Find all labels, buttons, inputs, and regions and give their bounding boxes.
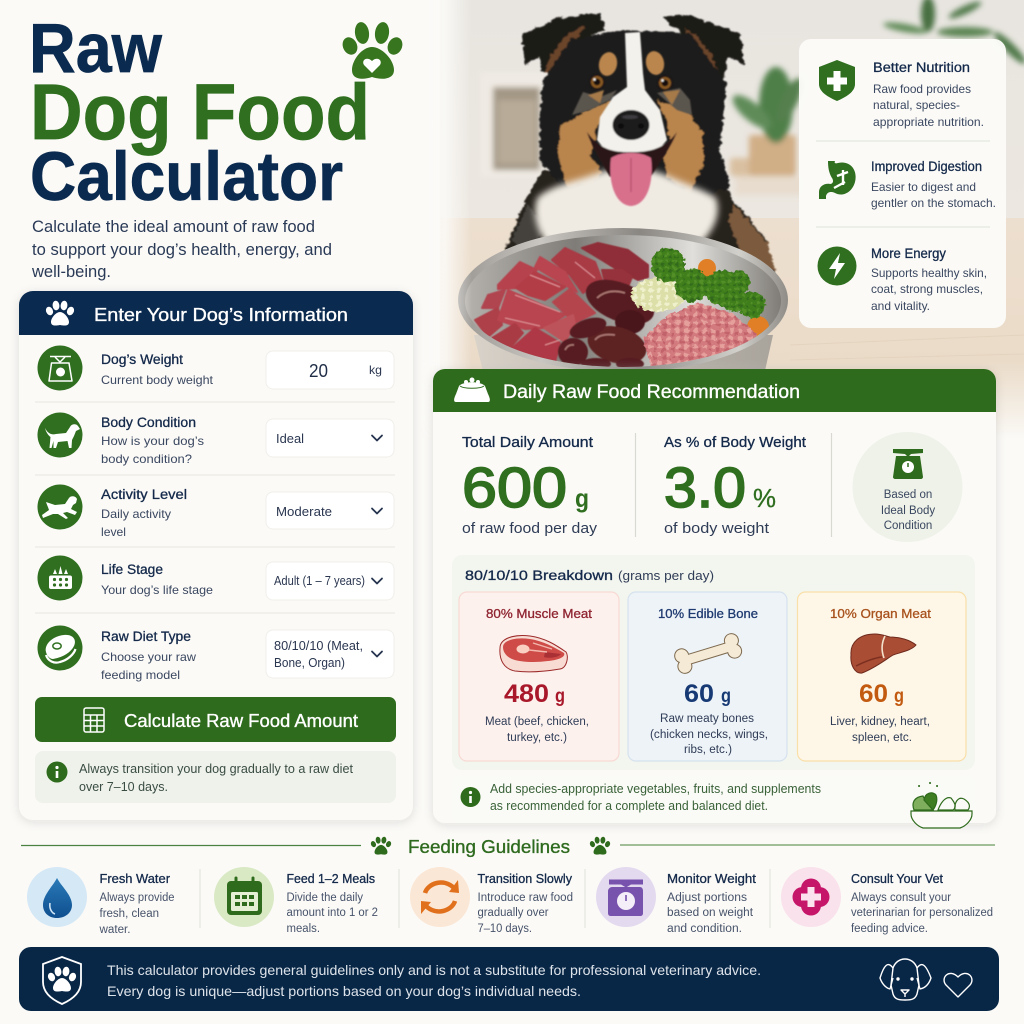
card: muscle meat: turkey, etc.) — [507, 732, 567, 744]
muscle meat chunks — [475, 243, 648, 362]
ground meat — [643, 303, 760, 372]
row: life stage — [38, 556, 394, 600]
row: raw diet type: Choose your raw — [101, 650, 196, 664]
icon: bone — [674, 633, 743, 674]
card: edible bone: 10% Edible Bone — [658, 606, 758, 621]
panel: enter your dog's information — [19, 291, 413, 820]
icon: heart outline — [944, 973, 972, 997]
guideline: feed 1-2 meals — [214, 867, 378, 935]
recommendation header — [433, 369, 996, 412]
row: activity level: Activity Level — [101, 487, 187, 502]
row: dog's weight: Dog’s Weight — [101, 352, 183, 367]
card: muscle meat: g — [555, 686, 565, 707]
row: activity level: level — [101, 525, 126, 539]
row: dog's weight: 20 — [309, 361, 328, 381]
card: edible bone: 60 — [684, 680, 714, 708]
note: transition tip — [35, 751, 396, 803]
guideline: transition slowly: Introduce raw food — [478, 892, 573, 904]
stat: total daily amount — [462, 435, 598, 537]
stat: total daily amount: 600 — [462, 456, 567, 520]
recommendation header: Daily Raw Food Recommendation — [503, 382, 800, 403]
subtitle: Calculate the ideal amount of raw food — [32, 217, 315, 236]
card: organ meat: spleen, etc. — [852, 732, 912, 744]
card: muscle meat: 80% Muscle Meat — [486, 606, 592, 621]
guideline: feed 1-2 meals: amount into 1 or 2 — [286, 907, 378, 919]
panel: daily raw food recommendation — [433, 369, 996, 828]
note: supplements: as recommended for a complete and balanced diet. — [490, 799, 768, 813]
stat: percent of body weight — [664, 435, 806, 537]
row: raw diet type: Bone, Organ) — [274, 656, 345, 670]
card: muscle meat: 480 — [504, 680, 549, 708]
guideline: monitor weight: Monitor Weight — [667, 872, 757, 886]
row: dog's weight — [38, 346, 394, 390]
button: calculate raw food amount — [35, 697, 396, 742]
badge: based on ideal body condition — [852, 432, 962, 542]
guideline: transition slowly: 7–10 days. — [478, 923, 532, 935]
guideline: fresh water: fresh, clean — [100, 908, 159, 920]
note: transition tip: over 7–10 days. — [79, 780, 168, 794]
icon: dog outline — [880, 959, 931, 1000]
row: dog's weight: Current body weight — [101, 373, 214, 387]
badge: based on ideal body condition: Ideal Body — [881, 505, 935, 517]
card: edible bone: (chicken necks, wings, — [650, 729, 768, 741]
row: body condition: How is your dog’s — [101, 434, 204, 448]
guideline: monitor weight — [596, 867, 757, 935]
guideline: fresh water: water. — [98, 924, 130, 936]
title: Dog Food — [30, 67, 370, 156]
subtitle — [31, 217, 332, 281]
icon: liver — [851, 634, 916, 673]
guideline: monitor weight: Adjust portions — [667, 892, 747, 904]
stat: total daily amount: g — [575, 483, 589, 513]
row: raw diet type: feeding model — [101, 668, 180, 682]
panel: benefits — [799, 39, 1006, 328]
card: edible bone — [628, 592, 787, 761]
guideline: consult your vet — [781, 867, 993, 935]
note: supplements — [452, 776, 975, 822]
row: activity level — [38, 484, 394, 539]
guideline: feed 1-2 meals: meals. — [286, 923, 320, 935]
card: organ meat: g — [894, 686, 904, 707]
card: edible bone: ribs, etc.) — [684, 744, 732, 756]
disclaimer bar: This calculator provides general guidelines only and is not a substitute for professional veterinary advice. — [107, 962, 761, 978]
benefit: more energy: and vitality. — [871, 299, 930, 313]
benefit: more energy: coat, strong muscles, — [871, 282, 983, 296]
disclaimer bar — [19, 947, 999, 1011]
wooden floor lines — [790, 335, 1024, 360]
row: raw diet type — [38, 626, 394, 682]
badge: based on ideal body condition: Based on — [884, 489, 932, 501]
card: muscle meat: Meat (beef, chicken, — [485, 716, 589, 728]
row: body condition — [38, 412, 394, 466]
note: supplements: Add species-appropriate vegetables, fruits, and supplements — [490, 782, 821, 796]
title — [29, 9, 370, 215]
card: organ meat: 60 — [859, 680, 888, 708]
subtitle: to support your dog’s health, energy, and — [32, 240, 332, 259]
stat: percent of body weight: % — [753, 483, 776, 513]
heading: feeding guidelines — [21, 836, 995, 857]
guideline: monitor weight: based on weight — [667, 907, 754, 919]
row: raw diet type: 80/10/10 (Meat, — [274, 639, 363, 653]
benefit: improved digestion — [819, 159, 996, 210]
stat: percent of body weight: 3.0 — [664, 456, 746, 520]
card: organ meat: 10% Organ Meat — [830, 606, 931, 621]
guideline: consult your vet: Consult Your Vet — [851, 872, 944, 886]
icon: green paw with heart — [340, 21, 405, 79]
benefit: more energy: Supports healthy skin, — [871, 266, 987, 280]
stat: percent of body weight: of body weight — [664, 520, 770, 537]
note: transition tip: Always transition your dog gradually to a raw diet — [79, 762, 354, 776]
white chest fur — [535, 168, 718, 242]
benefit: improved digestion: Improved Digestion — [871, 159, 982, 174]
row: life stage: Adult (1 – 7 years) — [274, 574, 365, 588]
benefit: better nutrition — [819, 60, 984, 129]
benefit: better nutrition: natural, species- — [873, 98, 960, 112]
title: Calculator — [30, 138, 343, 215]
stat: total daily amount: of raw food per day — [462, 520, 598, 537]
card: edible bone: g — [721, 686, 731, 707]
guideline: monitor weight: and condition. — [667, 923, 742, 935]
vegetables — [698, 259, 716, 277]
card: organ meat — [798, 592, 966, 761]
guideline: fresh water: Fresh Water — [100, 872, 170, 886]
guideline: feed 1-2 meals: Divide the daily — [286, 892, 363, 904]
subtitle: well-being. — [31, 262, 111, 281]
icon: salad bowl — [911, 783, 972, 828]
badge: based on ideal body condition: Condition — [884, 520, 932, 532]
row: activity level: Daily activity — [101, 507, 171, 521]
benefit: better nutrition: Better Nutrition — [873, 60, 970, 75]
benefit: better nutrition: appropriate nutrition. — [873, 115, 984, 129]
icon: steak — [500, 636, 567, 672]
hero photo: dog with raw food bowl — [420, 0, 1024, 440]
row: body condition: body condition? — [101, 452, 192, 466]
guideline: consult your vet: Always consult your — [851, 892, 951, 904]
guideline: fresh water — [27, 867, 174, 936]
breakdown box: (grams per day) — [618, 568, 714, 583]
card: muscle meat — [459, 592, 619, 761]
guideline: transition slowly: gradually over — [478, 907, 549, 919]
stat: total daily amount: Total Daily Amount — [462, 435, 593, 451]
guideline: fresh water: Always provide — [100, 892, 174, 904]
guideline: consult your vet: feeding advice. — [851, 923, 928, 935]
card: edible bone: Raw meaty bones — [660, 713, 754, 725]
left photo fade — [440, 0, 470, 370]
panel header — [19, 291, 413, 335]
row: dog's weight: kg — [369, 363, 382, 377]
title: Raw — [29, 9, 163, 87]
row: life stage: Life Stage — [101, 562, 163, 577]
dog — [500, 13, 775, 280]
guideline: transition slowly — [410, 867, 573, 935]
guideline: consult your vet: veterinarian for personalized — [851, 907, 993, 919]
panel header: Enter Your Dog’s Information — [94, 304, 348, 325]
benefit: more energy: More Energy — [871, 246, 946, 261]
disclaimer bar: Every dog is unique—adjust portions based on your dog’s individual needs. — [107, 983, 581, 999]
row: activity level: Moderate — [276, 504, 332, 519]
icon: paw shield — [43, 957, 81, 1004]
benefit: better nutrition: Raw food provides — [873, 82, 971, 96]
breakdown box — [452, 555, 975, 770]
stat: percent of body weight: As % of Body Weight — [664, 435, 806, 451]
row: life stage: Your dog’s life stage — [101, 583, 213, 597]
benefit: more energy — [818, 246, 987, 313]
breakdown box: 80/10/10 Breakdown — [465, 567, 613, 583]
liver pieces — [558, 279, 655, 367]
button: calculate raw food amount: Calculate Raw Food Amount — [124, 711, 358, 731]
bottom photo fade — [572, 363, 1024, 440]
card: organ meat: Liver, kidney, heart, — [830, 716, 930, 728]
steel bowl with raw food — [458, 228, 788, 375]
row: body condition: Body Condition — [101, 415, 196, 430]
benefit: improved digestion: gentler on the stomach. — [871, 196, 996, 210]
guideline: transition slowly: Transition Slowly — [478, 872, 573, 886]
heading: feeding guidelines: Feeding Guidelines — [408, 837, 570, 857]
guideline: feed 1-2 meals: Feed 1–2 Meals — [286, 872, 375, 886]
row: body condition: Ideal — [276, 431, 304, 446]
benefit: improved digestion: Easier to digest and — [871, 180, 976, 194]
row: raw diet type: Raw Diet Type — [101, 629, 191, 644]
